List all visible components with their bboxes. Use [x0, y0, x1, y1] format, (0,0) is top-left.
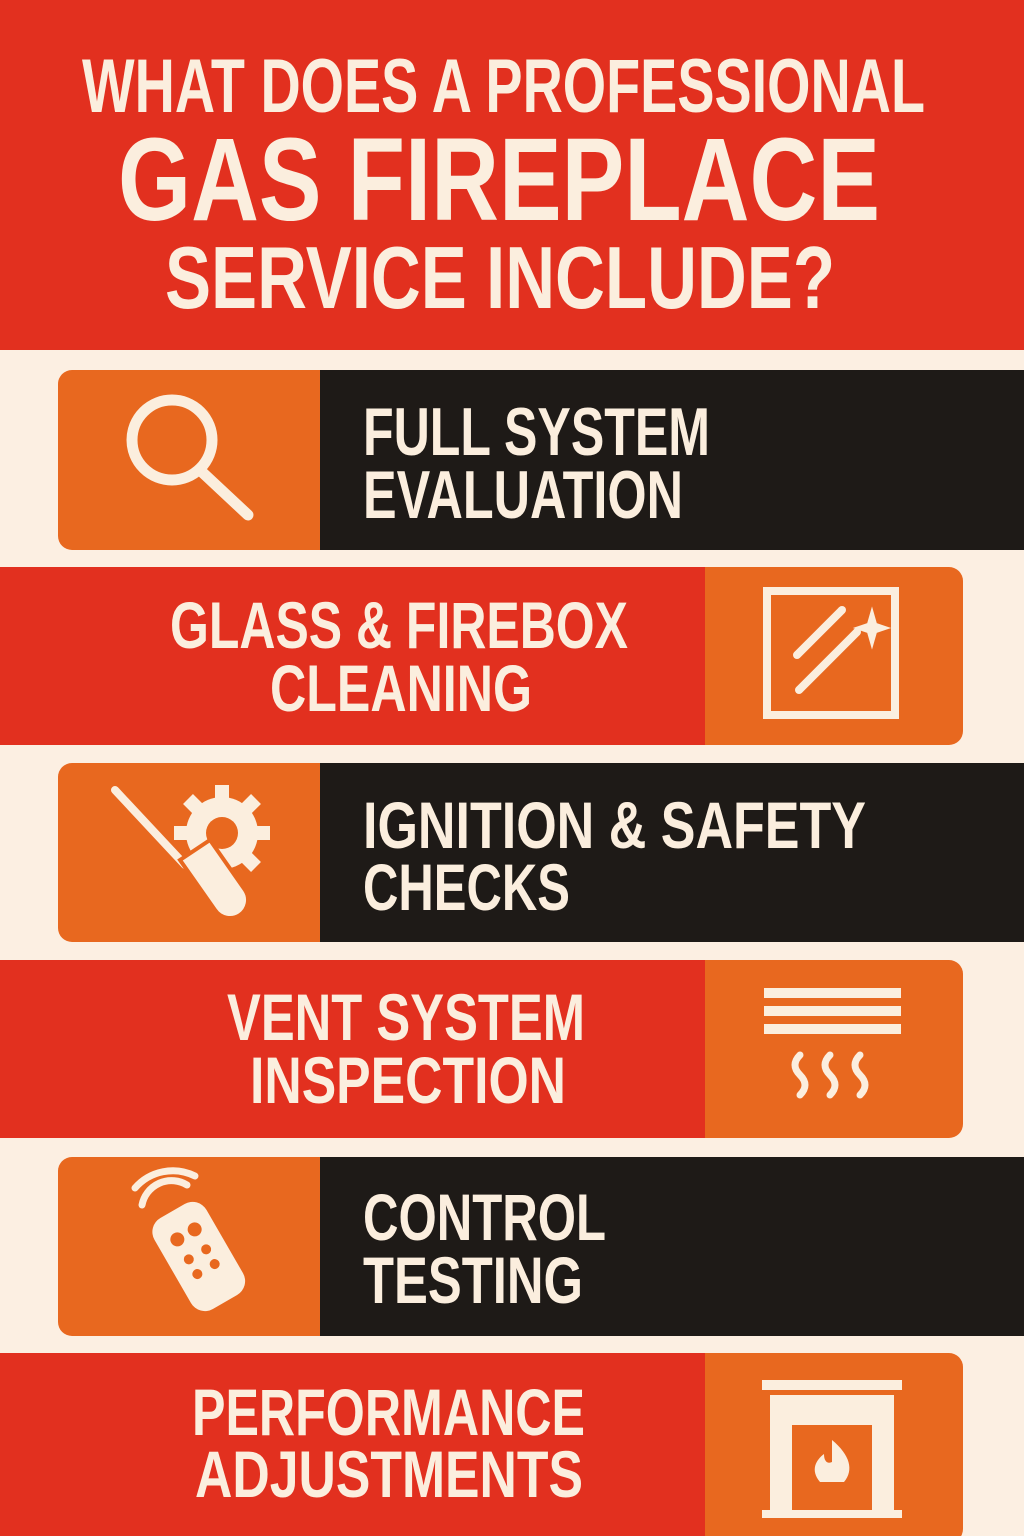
icon: tools and gear: [115, 785, 270, 918]
icon: glass panel: [767, 591, 895, 715]
panel: control testing: CONTROL: [363, 1180, 606, 1254]
panel: vent system inspection: INSPECTION: [250, 1043, 566, 1117]
panel: full system evaluation: [58, 370, 1024, 550]
icon: magnifying glass: [132, 400, 248, 515]
panel: glass & firebox cleaning: GLASS & FIREBOX: [170, 588, 628, 662]
panel: performance adjustments: PERFORMANCE: [192, 1375, 585, 1449]
panel: performance adjustments: ADJUSTMENTS: [195, 1437, 583, 1511]
panel: full system evaluation: EVALUATION: [363, 457, 683, 533]
panel: ignition & safety checks: IGNITION & SAFETY: [363, 788, 866, 862]
title: SERVICE INCLUDE?: [165, 228, 835, 327]
panel: ignition & safety checks: CHECKS: [363, 850, 570, 924]
panel: vent system inspection: VENT SYSTEM: [227, 980, 585, 1054]
panel: full system evaluation: FULL SYSTEM: [363, 394, 710, 470]
panel: vent system inspection: [0, 960, 963, 1138]
icon: remote: [135, 1171, 251, 1317]
icon: vent: [764, 988, 901, 1095]
panel: ignition & safety checks: [58, 763, 1024, 942]
panel: control testing: [58, 1157, 1024, 1336]
panel: control testing: TESTING: [363, 1243, 583, 1317]
title: [0, 0, 1024, 350]
icon: fireplace: [762, 1380, 902, 1518]
panel: performance adjustments: [0, 1353, 963, 1536]
panel: glass & firebox cleaning: [0, 567, 963, 745]
panel: glass & firebox cleaning: CLEANING: [270, 651, 532, 725]
